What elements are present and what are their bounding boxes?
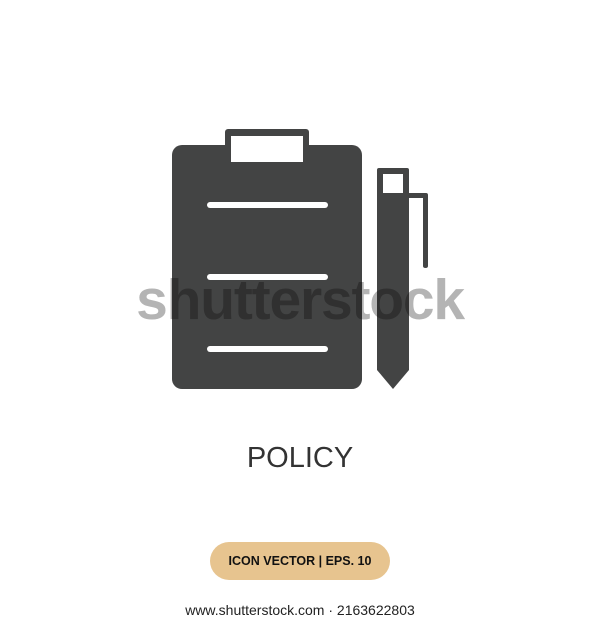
- badge: icon vector eps 10: ICON VECTOR | EPS. 10: [229, 554, 371, 568]
- icon: pen: [377, 168, 428, 389]
- watermark: shutterstock: [136, 268, 464, 332]
- title: POLICY: POLICY: [247, 442, 353, 474]
- footer: stock id: www.shutterstock.com · 2163622803: [185, 602, 415, 618]
- icon: clipboard: [172, 129, 362, 389]
- badge: icon vector eps 10: [210, 542, 390, 580]
